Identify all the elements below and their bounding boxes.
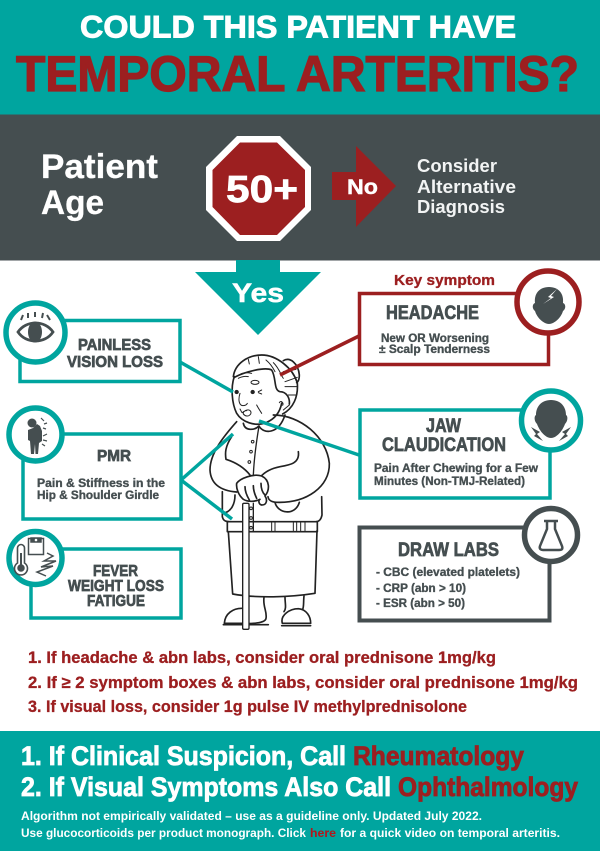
treatment list: 2. If ≥ 2 symptom boxes & abn labs, consider oral prednisone 1mg/kg bbox=[28, 674, 578, 692]
jaw claudication heading: CLAUDICATION bbox=[382, 435, 506, 456]
patient age band bbox=[0, 114, 600, 260]
referral line 1: 1. If Clinical Suspicion, Call bbox=[21, 741, 346, 771]
stop sign: 50+ bbox=[206, 136, 311, 241]
treatment list bbox=[28, 649, 578, 716]
referral line 2: Ophthalmology bbox=[398, 772, 578, 802]
icon: head with jaw pain bolts bbox=[531, 400, 571, 441]
labs list: - CBC (elevated platelets) bbox=[376, 565, 520, 579]
title line 1: COULD THIS PATIENT HAVE bbox=[80, 8, 516, 44]
jaw claudication heading bbox=[382, 416, 506, 456]
connector: PMR bbox=[181, 434, 233, 519]
fever weight loss fatigue label: FATIGUE bbox=[87, 593, 145, 610]
connector: jaw claudication bbox=[259, 421, 359, 455]
treatment list: 3. If visual loss, consider 1g pulse IV methylprednisolone bbox=[28, 698, 467, 716]
PMR heading: PMR bbox=[97, 448, 131, 465]
arrow: Yes: Yes bbox=[232, 278, 284, 308]
treatment list: 1. If headache & abn labs, consider oral prednisone 1mg/kg bbox=[28, 649, 496, 667]
patient figure bbox=[210, 355, 329, 629]
painless vision loss label: VISION LOSS bbox=[67, 354, 163, 371]
jaw claudication description: Pain After Chewing for a Few bbox=[374, 461, 539, 475]
icon: flask bbox=[540, 521, 562, 550]
fever weight loss fatigue label bbox=[68, 563, 164, 610]
painless vision loss label bbox=[67, 337, 163, 371]
referral line 2: 2. If Visual Symptoms Also Call bbox=[21, 772, 391, 802]
disclaimer line 2: here bbox=[310, 828, 336, 840]
title band bbox=[0, 0, 600, 114]
disclaimer line 1: Algorithm not empirically validated – use as a guideline only. Updated July 2022. bbox=[21, 811, 482, 823]
panel: painless vision loss bbox=[6, 303, 180, 382]
headache heading: HEADACHE bbox=[386, 303, 479, 324]
patient age label: Age bbox=[41, 184, 104, 222]
referral band bbox=[0, 731, 600, 851]
draw labs heading: DRAW LABS bbox=[398, 540, 499, 561]
panel: PMR bbox=[9, 408, 181, 519]
title line 2: TEMPORAL ARTERITIS? bbox=[16, 46, 579, 102]
panel: fever weight loss fatigue bbox=[9, 532, 181, 618]
patient age label bbox=[41, 148, 158, 222]
consider alternative diagnosis bbox=[417, 156, 516, 217]
panel: jaw claudication bbox=[360, 391, 580, 498]
connector: vision loss bbox=[180, 362, 233, 392]
headache description bbox=[379, 331, 490, 356]
icon: eye bbox=[18, 312, 53, 342]
labs list: - CRP (abn > 10) bbox=[376, 581, 466, 595]
key symptom label: Key symptom bbox=[394, 273, 495, 289]
stop sign: 50+: 50+ bbox=[226, 169, 298, 211]
PMR description bbox=[37, 478, 165, 502]
fever weight loss fatigue label: FEVER bbox=[93, 563, 138, 580]
fever weight loss fatigue label: WEIGHT LOSS bbox=[68, 578, 164, 595]
consider alternative diagnosis: Consider bbox=[417, 156, 497, 176]
labs list: - ESR (abn > 50) bbox=[376, 596, 465, 610]
panel: headache bbox=[360, 271, 579, 364]
PMR description: Pain & Stiffness in the bbox=[37, 478, 165, 490]
patient age label: Patient bbox=[41, 148, 158, 186]
disclaimer line 2: for a quick video on temporal arteritis. bbox=[340, 828, 560, 840]
icon: body with shoulder and hip pain bbox=[28, 418, 47, 454]
jaw claudication description bbox=[374, 461, 539, 488]
disclaimer line 2: Use glucocorticoids per product monograph. Click bbox=[21, 828, 307, 840]
connector: headache bbox=[280, 336, 359, 375]
consider alternative diagnosis: Diagnosis bbox=[417, 197, 505, 217]
headache description: New OR Worsening bbox=[381, 331, 489, 345]
arrow: Yes bbox=[195, 260, 321, 335]
headache description: ± Scalp Tenderness bbox=[379, 342, 490, 356]
consider alternative diagnosis: Alternative bbox=[417, 177, 516, 197]
icon: head with lightning bolt bbox=[533, 287, 565, 324]
painless vision loss label: PAINLESS bbox=[78, 337, 151, 354]
arrow: No: No bbox=[347, 176, 378, 199]
panel: draw labs bbox=[360, 508, 578, 620]
labs list bbox=[376, 565, 520, 610]
jaw claudication heading: JAW bbox=[426, 416, 461, 437]
PMR description: Hip & Shoulder Girdle bbox=[37, 490, 159, 502]
arrow: No bbox=[332, 146, 396, 227]
icon: thermometer, scale, fatigue zigzag bbox=[14, 538, 56, 576]
jaw claudication description: Minutes (Non-TMJ-Related) bbox=[374, 474, 525, 488]
referral line 1: Rheumatology bbox=[353, 741, 524, 771]
